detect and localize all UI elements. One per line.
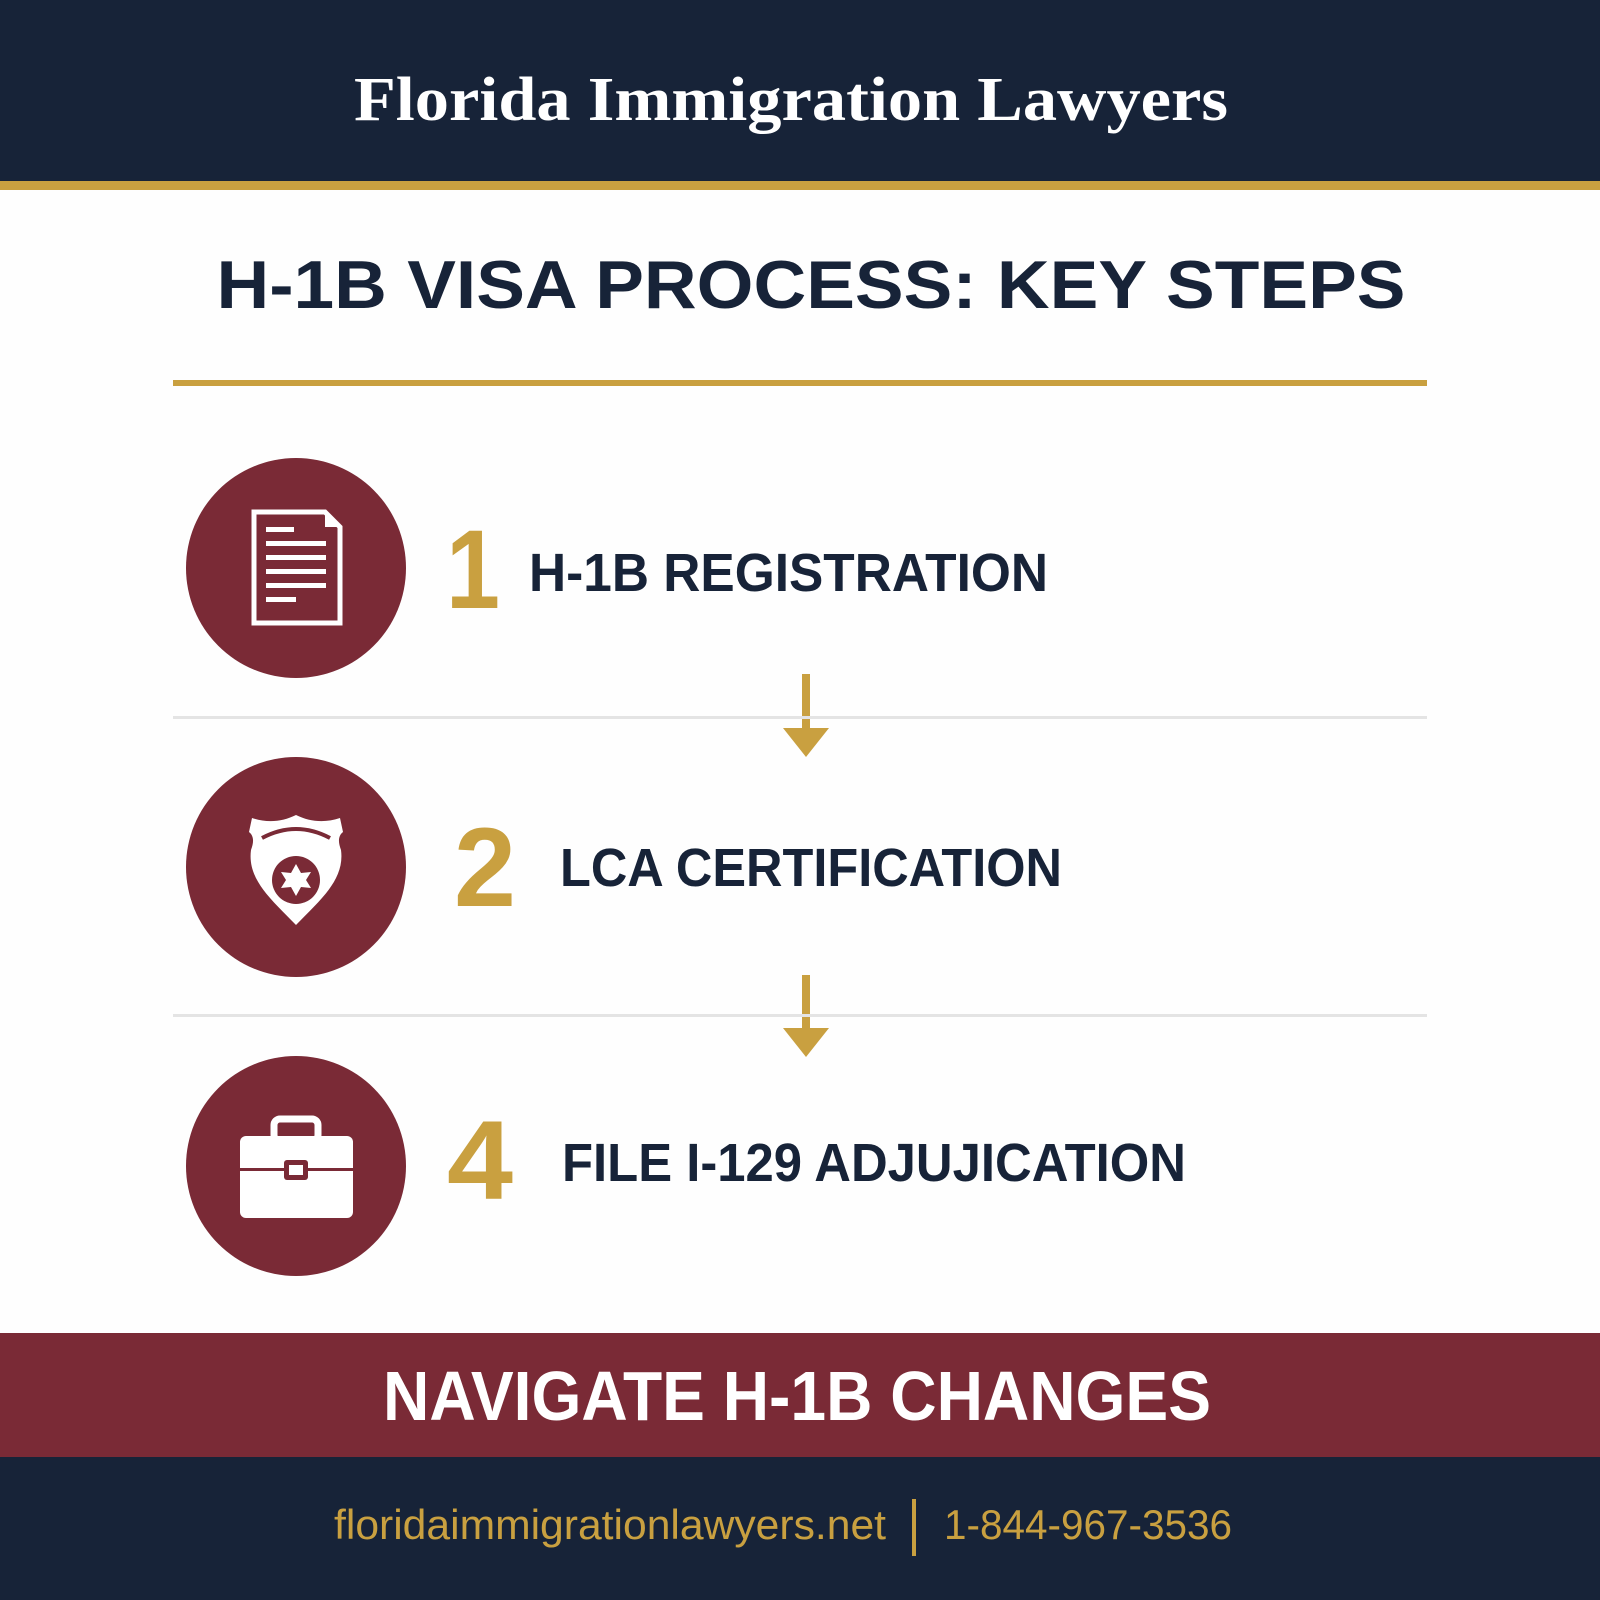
number 1: 1 bbox=[446, 507, 500, 632]
step 1 bbox=[186, 458, 1048, 678]
header title: Florida Immigration Lawyers bbox=[354, 66, 1228, 134]
footer bbox=[0, 1457, 1600, 1600]
arrow 1 bbox=[783, 674, 829, 757]
header bar bbox=[0, 0, 1600, 190]
arrow 2 bbox=[783, 975, 829, 1057]
title underline bbox=[173, 380, 1427, 386]
icon: document bbox=[186, 458, 406, 678]
label: H-1B registration: H-1B REGISTRATION bbox=[529, 543, 1048, 603]
step 2 bbox=[186, 757, 1062, 977]
number 4: 4 bbox=[447, 1098, 513, 1223]
website: floridaimmigrationlawyers.net bbox=[334, 1501, 886, 1548]
icon: briefcase bbox=[186, 1056, 406, 1276]
phone: 1-844-967-3536 bbox=[944, 1501, 1232, 1548]
icon: badge bbox=[186, 757, 406, 977]
step 4 bbox=[186, 1056, 1186, 1276]
number 2: 2 bbox=[454, 805, 516, 930]
main title: H-1B VISA PROCESS: KEY STEPS bbox=[216, 247, 1406, 323]
CTA band: NAVIGATE H-1B CHANGES bbox=[383, 1357, 1211, 1435]
CTA band bbox=[0, 1333, 1600, 1457]
label: LCA certification: LCA CERTIFICATION bbox=[560, 838, 1062, 898]
label: file I-129: FILE I-129 ADJUJICATION bbox=[562, 1133, 1186, 1193]
